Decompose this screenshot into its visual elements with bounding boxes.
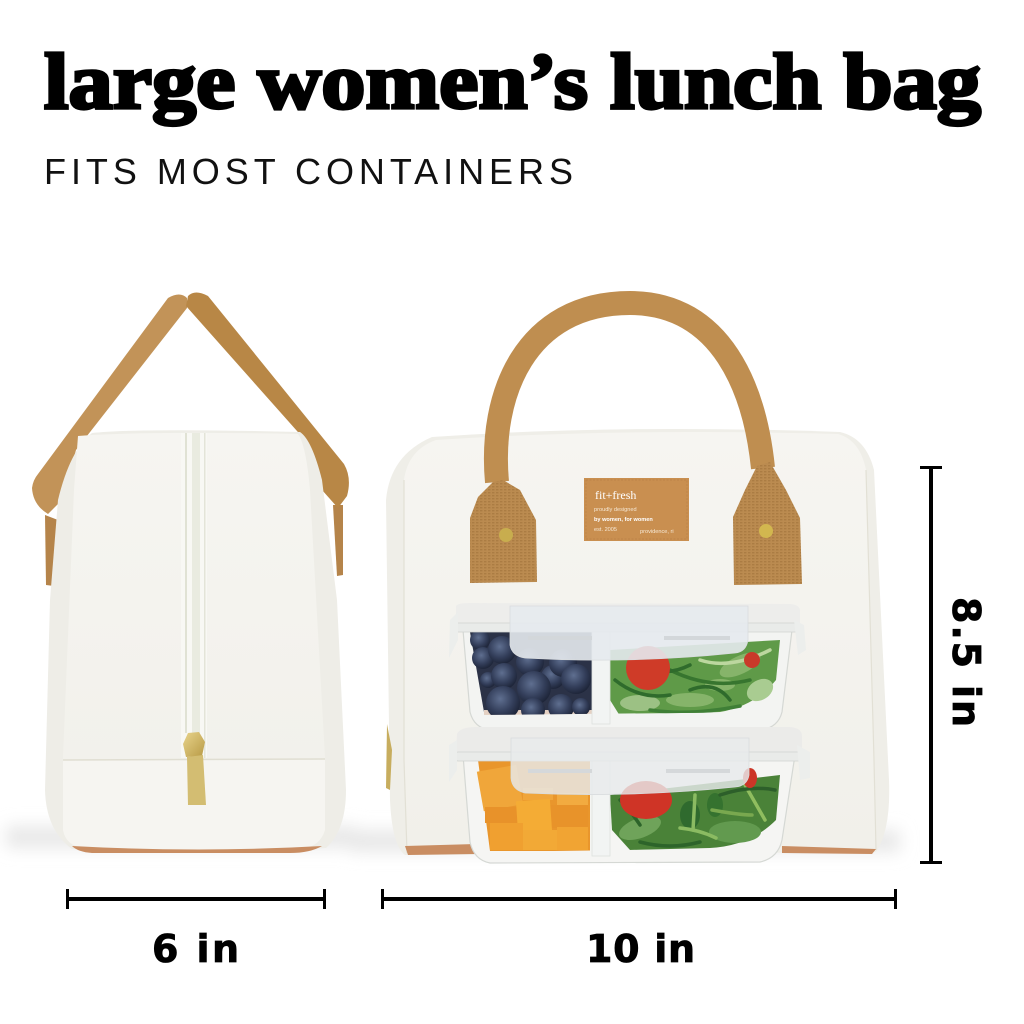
handle	[496, 303, 763, 482]
salad	[610, 640, 780, 716]
zipper pull	[183, 732, 206, 805]
lid	[449, 727, 810, 795]
label: 10 in: 10 in	[586, 927, 695, 971]
brand label	[584, 478, 689, 541]
side body	[45, 430, 346, 852]
salad	[610, 768, 780, 850]
glass divider	[592, 632, 610, 724]
bottom band	[63, 759, 325, 850]
brand label: providence, ri	[640, 529, 674, 535]
side handle	[32, 292, 349, 586]
glass body	[463, 755, 795, 863]
right handle tab	[733, 462, 802, 585]
side view of bag	[32, 292, 349, 853]
cheese cubes	[477, 760, 590, 851]
label: 6 in: 6 in	[152, 927, 239, 971]
front body	[386, 429, 889, 855]
glass body	[463, 630, 792, 730]
lid	[449, 603, 806, 660]
side base trim	[72, 846, 322, 853]
width dimension line: 6 in	[66, 889, 326, 909]
ground shadow	[6, 826, 900, 852]
title: large women’s lunch bag	[44, 39, 981, 126]
top glass container	[449, 603, 806, 730]
bottom glass container	[449, 727, 810, 863]
subtitle: FITS MOST CONTAINERS	[44, 151, 573, 192]
label: 8.5 in: 8.5 in	[944, 597, 988, 727]
brand label: proudly designed	[594, 507, 637, 513]
width dimension line: 10 in	[381, 889, 897, 909]
front base trim	[405, 844, 876, 855]
glass divider	[592, 756, 610, 856]
brand label: by women, for women	[594, 517, 653, 523]
left handle tab	[470, 480, 537, 583]
brand label: fit+fresh	[595, 488, 636, 502]
front view of bag	[386, 303, 889, 855]
height dimension line: 8.5 in	[920, 466, 942, 864]
blueberries	[470, 630, 592, 722]
side zipper pull	[386, 724, 392, 790]
brand label: est. 2005	[594, 527, 617, 533]
zipper	[181, 433, 207, 758]
